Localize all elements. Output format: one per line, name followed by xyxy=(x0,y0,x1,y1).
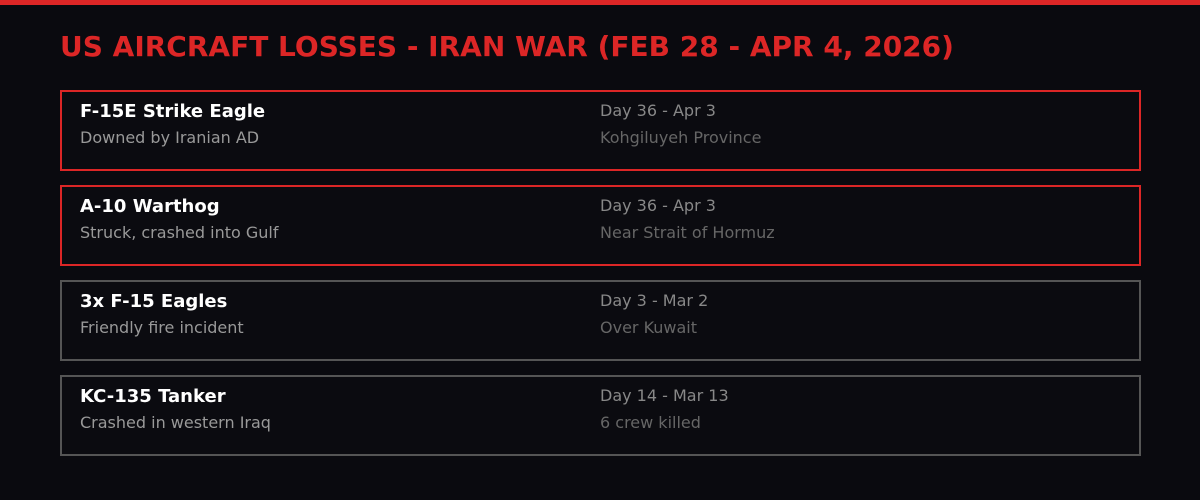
card: A-10 xyxy=(60,185,1141,266)
location: Near Strait of Hormuz xyxy=(600,223,775,242)
card: F-15E xyxy=(60,90,1141,171)
aircraft name: A-10 Warthog xyxy=(80,196,220,217)
location: Over Kuwait xyxy=(600,318,697,337)
date: Day 36 - Apr 3 xyxy=(600,196,716,215)
aircraft name: KC-135 Tanker xyxy=(80,386,226,407)
location: 6 crew killed xyxy=(600,413,701,432)
date: Day 14 - Mar 13 xyxy=(600,386,729,405)
location: Kohgiluyeh Province xyxy=(600,128,761,147)
top accent bar xyxy=(0,0,1200,5)
date: Day 36 - Apr 3 xyxy=(600,101,716,120)
aircraft name: 3x F-15 Eagles xyxy=(80,291,227,312)
cause: Struck, crashed into Gulf xyxy=(80,223,278,242)
cause: Crashed in western Iraq xyxy=(80,413,271,432)
card: KC-135 xyxy=(60,375,1141,456)
title: US AIRCRAFT LOSSES - IRAN WAR (FEB 28 - APR 4, 2026) xyxy=(60,30,954,63)
date: Day 3 - Mar 2 xyxy=(600,291,708,310)
card: 3x F-15 xyxy=(60,280,1141,361)
cause: Friendly fire incident xyxy=(80,318,244,337)
aircraft name: F-15E Strike Eagle xyxy=(80,101,265,122)
cause: Downed by Iranian AD xyxy=(80,128,259,147)
